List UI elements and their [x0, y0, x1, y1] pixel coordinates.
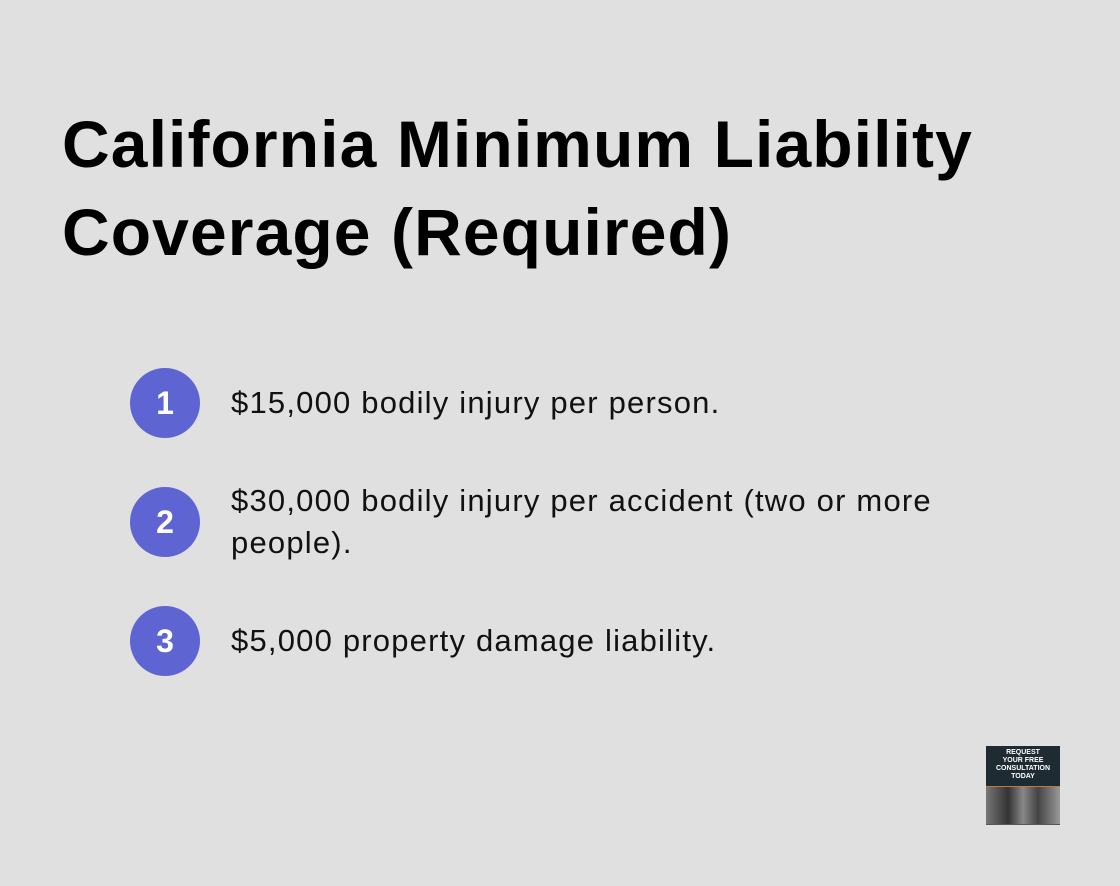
item 1 [130, 368, 720, 438]
text 1: $15,000 bodily injury per person. [231, 385, 720, 420]
icon: number 2: 2 [156, 504, 174, 540]
logo: consultation badge: CONSULTATION [996, 765, 1050, 772]
logo: consultation badge: YOUR FREE [1003, 757, 1043, 764]
icon: number 3: 3 [156, 623, 174, 659]
icon: number 2 [130, 487, 200, 557]
icon: number 1 [130, 368, 200, 438]
text 2: $30,000 bodily injury per accident (two or more people). [231, 483, 932, 560]
item 2 [130, 483, 932, 560]
icon: number 1: 1 [156, 385, 174, 421]
title [62, 107, 973, 269]
icon: number 3 [130, 606, 200, 676]
title: Coverage (Required) [62, 195, 732, 269]
logo: consultation badge: REQUEST [1006, 749, 1040, 756]
item 3 [130, 606, 716, 676]
title: California Minimum Liability [62, 107, 973, 181]
text 3: $5,000 property damage liability. [231, 623, 716, 658]
logo: consultation badge: TODAY [1011, 773, 1035, 780]
logo: consultation badge [986, 746, 1060, 825]
